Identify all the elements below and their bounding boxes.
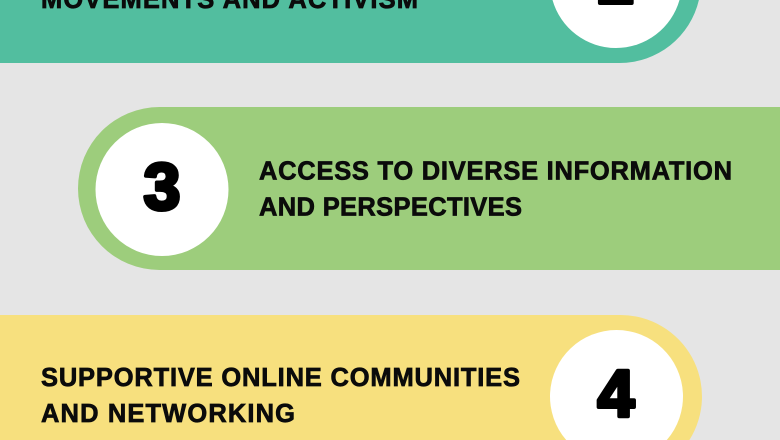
green bar — [78, 107, 780, 270]
heading: item 3: ACCESS TO DIVERSE INFORMATION — [259, 158, 732, 186]
yellow bar — [0, 315, 702, 440]
number badge 4: 4 — [598, 356, 635, 430]
number badge 4 — [550, 330, 683, 440]
heading: item 3 — [259, 158, 732, 222]
panel: item 2 (teal) — [0, 0, 699, 63]
panel: item 4 (yellow) — [0, 315, 702, 440]
heading: item 4: AND NETWORKING — [41, 400, 295, 428]
number badge 3 — [96, 123, 228, 256]
panel: item 3 (green) — [78, 107, 780, 270]
number badge 3: 3 — [144, 150, 180, 224]
heading: item 4 — [41, 364, 520, 428]
number badge 2 — [552, 0, 680, 48]
heading: item 4: SUPPORTIVE ONLINE COMMUNITIES — [41, 364, 520, 392]
heading: item 3: AND PERSPECTIVES — [259, 194, 522, 222]
teal bar — [0, 0, 699, 63]
